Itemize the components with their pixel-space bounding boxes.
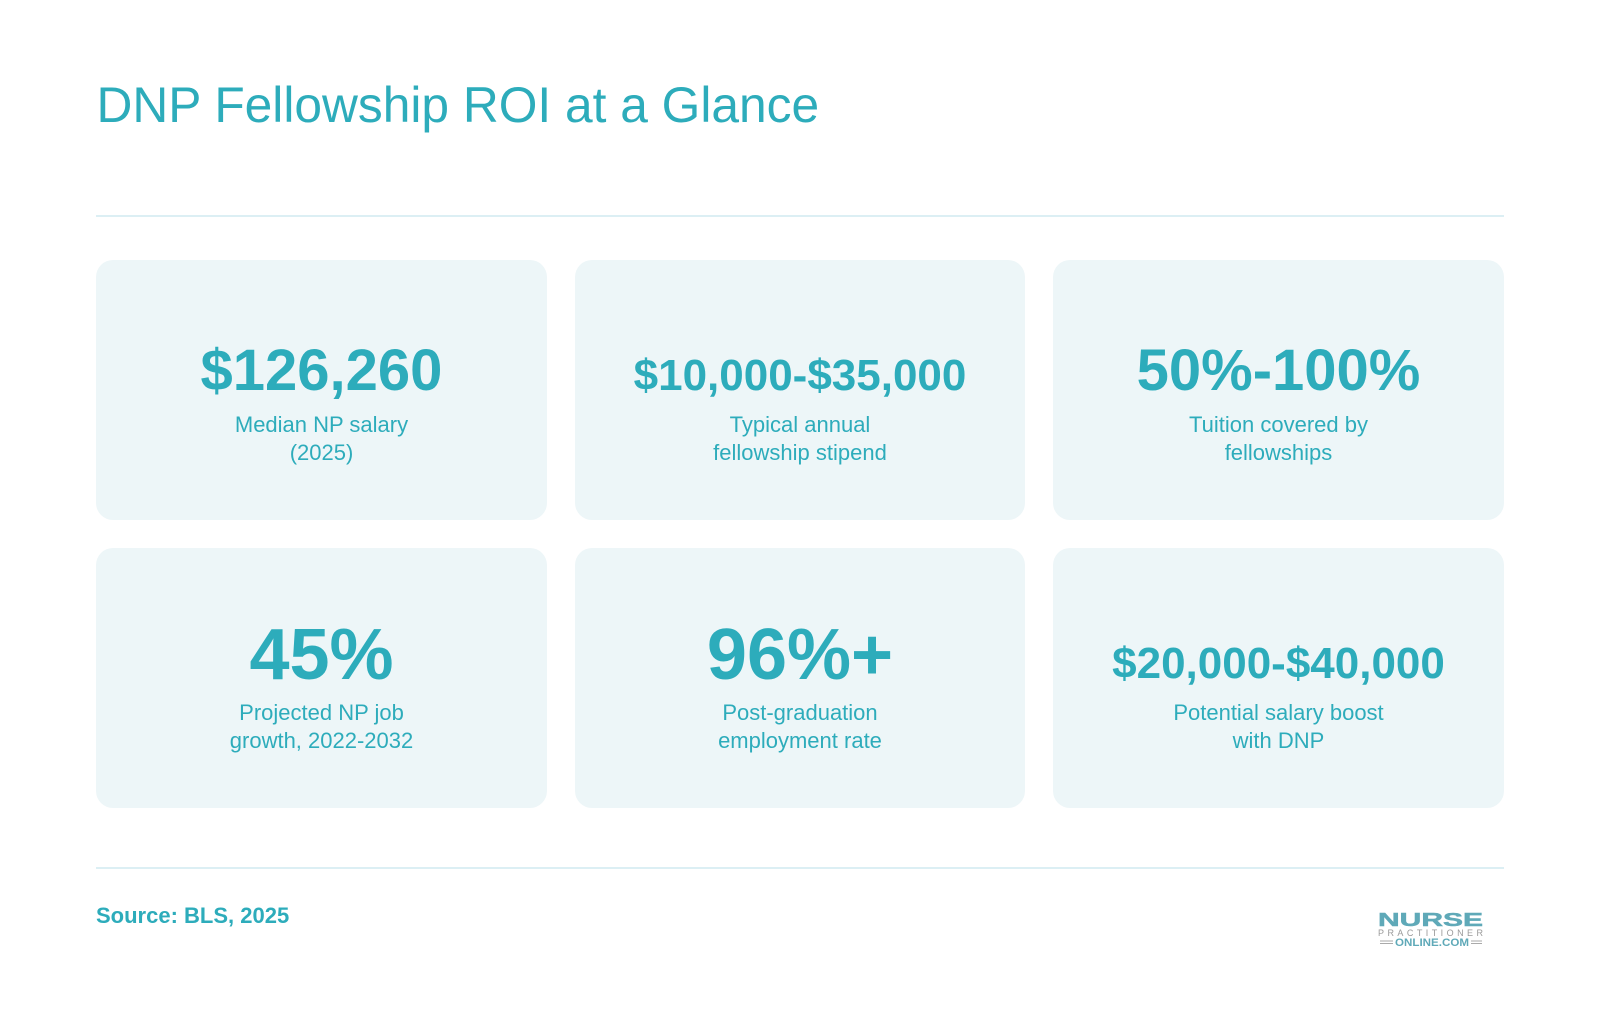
- label: salary boost: Potential salary boost: [1173, 700, 1384, 725]
- title: DNP Fellowship ROI at a Glance: [96, 77, 819, 133]
- label: job growth: [230, 700, 413, 753]
- stat: 50%-100%: 50%-100%: [1137, 338, 1420, 403]
- stat: $126,260: $126,260: [201, 338, 442, 403]
- stat: 45%: 45%: [249, 615, 394, 695]
- panel: tuition covered: [1053, 260, 1504, 520]
- logo: Nurse Practitioner Online.com: PRACTITIONER: [1378, 928, 1484, 938]
- label: job growth: growth, 2022-2032: [230, 728, 413, 753]
- source note: Source: BLS, 2025: [96, 903, 289, 928]
- label: median NP salary: Median NP salary: [235, 412, 408, 437]
- stat: 96%+: 96%+: [707, 615, 893, 695]
- panel: fellowship stipend: [575, 260, 1025, 520]
- panel: salary boost: [1053, 548, 1504, 808]
- label: job growth: Projected NP job: [239, 700, 404, 725]
- logo: Nurse Practitioner Online.com: NURSE: [1378, 909, 1483, 930]
- label: fellowship stipend: [713, 412, 887, 465]
- stat: $20,000-$40,000: $20,000-$40,000: [1112, 639, 1445, 688]
- panel: median NP salary: [96, 260, 547, 520]
- panel: employment rate: [575, 548, 1025, 808]
- label: employment rate: employment rate: [718, 728, 882, 753]
- stat: $10,000-$35,000: $10,000-$35,000: [634, 351, 966, 400]
- label: salary boost: [1173, 700, 1384, 753]
- label: salary boost: with DNP: [1233, 728, 1324, 753]
- label: employment rate: Post-graduation: [722, 700, 878, 725]
- panel: job growth: [96, 548, 547, 808]
- label: tuition covered: fellowships: [1225, 440, 1332, 465]
- label: median NP salary: [235, 412, 408, 465]
- label: fellowship stipend: fellowship stipend: [713, 440, 887, 465]
- logo: Nurse Practitioner Online.com: ONLINE.COM: [1395, 937, 1469, 949]
- logo: Nurse Practitioner Online.com: [1378, 909, 1484, 949]
- label: tuition covered: Tuition covered by: [1189, 412, 1368, 437]
- label: tuition covered: [1189, 412, 1368, 465]
- label: median NP salary: (2025): [290, 440, 353, 465]
- label: employment rate: [718, 700, 882, 753]
- label: fellowship stipend: Typical annual: [730, 412, 870, 437]
